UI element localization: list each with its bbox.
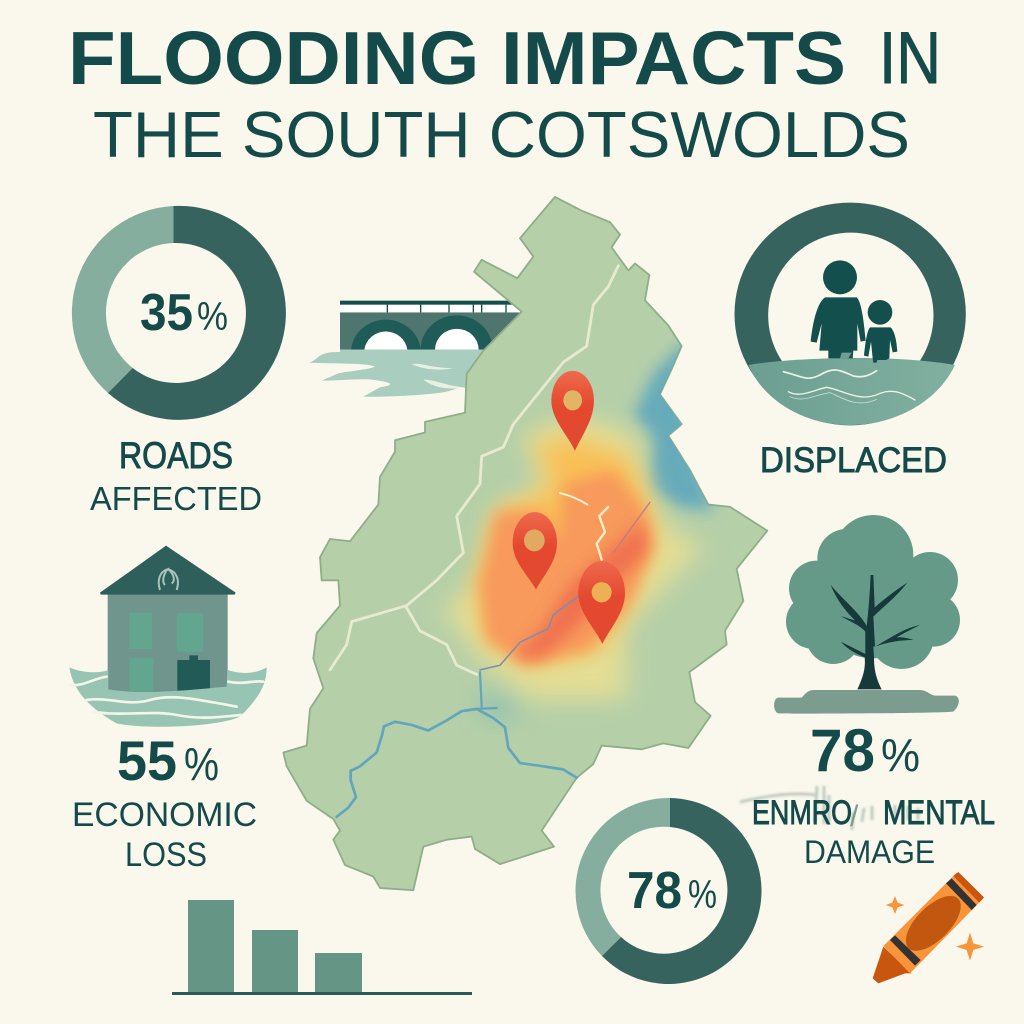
title [68, 16, 941, 171]
stat: environmental damage: MENTAL [883, 794, 995, 832]
stat: economic loss [72, 729, 257, 874]
donut chart: roads affected 35%: 35 [140, 284, 193, 342]
donut chart: 78% [576, 798, 762, 984]
icon: damaged tree [774, 515, 960, 714]
icon: displaced family in flood water [734, 203, 966, 425]
donut chart: 78%: 78 [627, 862, 682, 920]
icon: crayon with sparkles [873, 872, 984, 983]
stat: economic loss: LOSS [125, 836, 207, 874]
map pin 2 [513, 512, 557, 590]
donut chart: 78%: % [688, 873, 717, 917]
icon: flooded bridge [309, 301, 527, 397]
title: THE SOUTH COTSWOLDS [93, 98, 910, 171]
stat: environmental damage: ENMRO [752, 794, 852, 832]
roads [330, 266, 618, 670]
stat: environmental damage: % [881, 729, 920, 781]
map pin 3 [578, 561, 625, 644]
stat: environmental damage: / [850, 800, 859, 833]
icon: flooded house [69, 546, 267, 727]
stat: environmental damage: DAMAGE [804, 834, 935, 870]
donut chart: roads affected 35% [72, 206, 286, 420]
label: roads affected: AFFECTED [90, 480, 262, 517]
bar chart [172, 900, 472, 995]
stat: economic loss: ECONOMIC [72, 796, 257, 834]
flood heat map [443, 337, 713, 718]
stat: economic loss: % [184, 738, 219, 790]
donut chart: roads affected 35%: % [197, 295, 228, 339]
stat: environmental damage [740, 717, 995, 870]
stat: environmental damage: 78 [810, 717, 875, 784]
label: roads affected [90, 435, 262, 517]
label: displaced: DISPLACED [760, 441, 947, 480]
title: IN [879, 18, 941, 99]
label: roads affected: ROADS [119, 435, 233, 476]
title: FLOODING IMPACTS [68, 16, 846, 100]
stat: economic loss: 55 [117, 729, 177, 792]
map pin 1 [551, 371, 594, 451]
map: South Cotswolds [283, 197, 767, 890]
rivers [330, 266, 650, 817]
